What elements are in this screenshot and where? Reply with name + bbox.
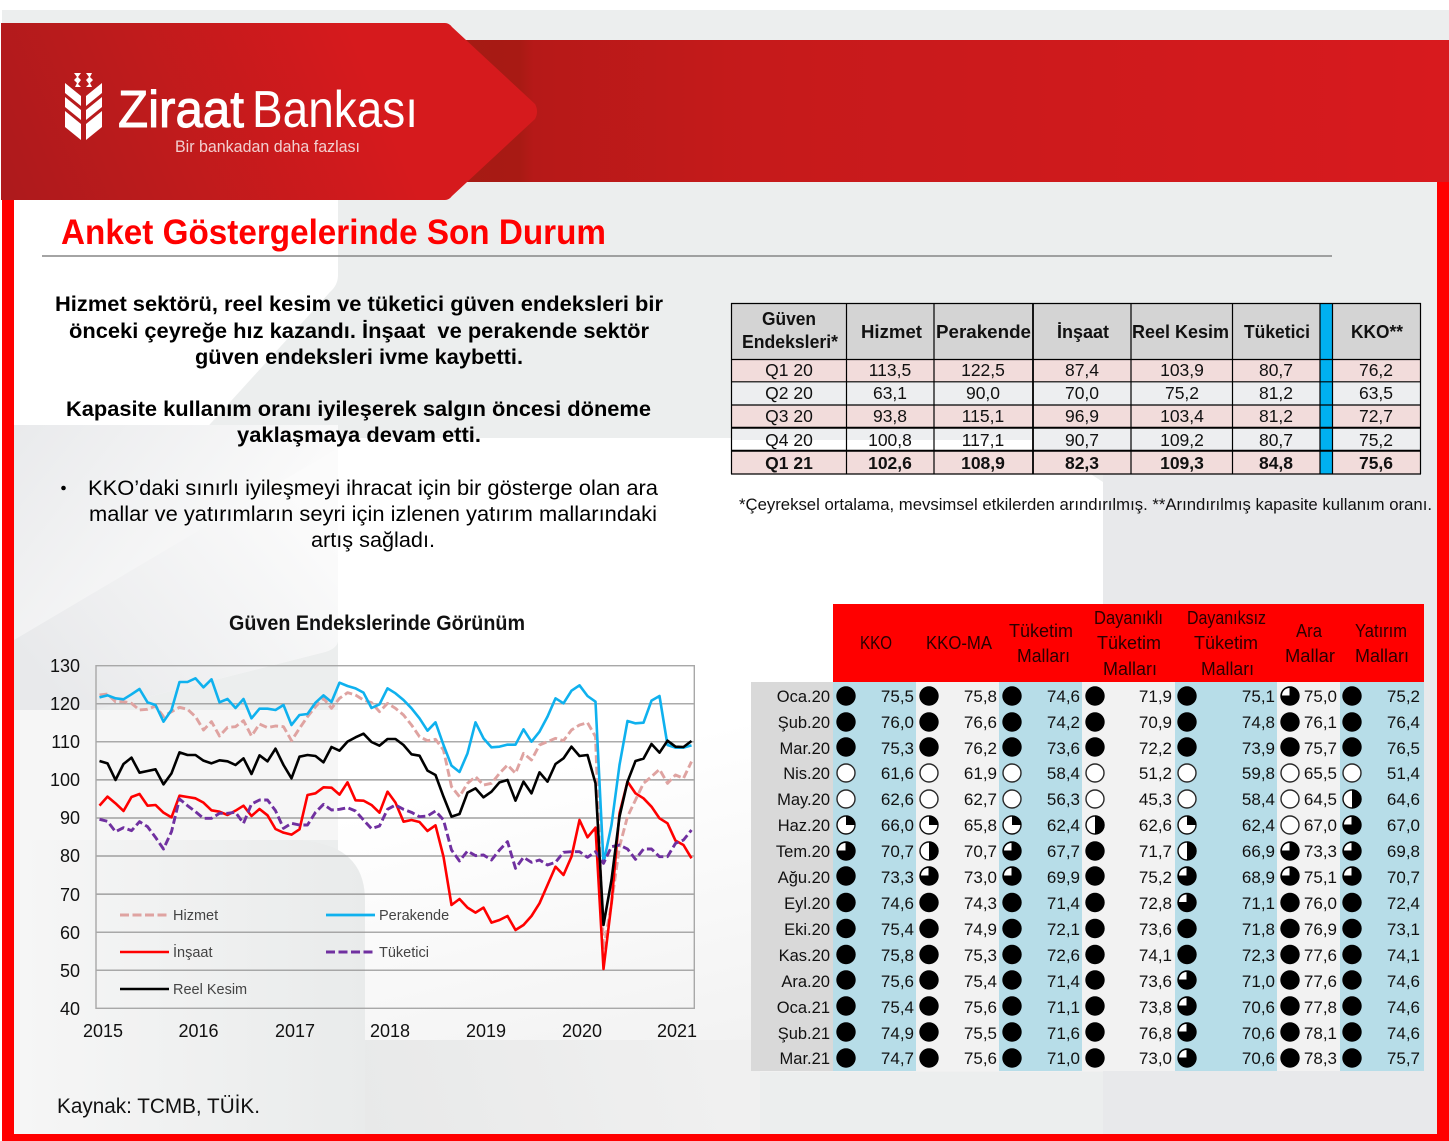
- row: Oca.21: Oca.21: [777, 999, 830, 1017]
- row: Oca.21: 73,8: [1139, 998, 1172, 1017]
- row: Haz.20: 65,8: [964, 816, 997, 835]
- y axis labels: 130: [50, 656, 80, 676]
- row: Ara.20: 71,0: [1242, 972, 1275, 991]
- table rows: Q1 21: [765, 453, 813, 473]
- row: Şub.20: 70,9: [1139, 713, 1172, 732]
- bullet paragraph: mallar ve yatırımların seyri için izlenen yatırım mallarındaki: [89, 502, 657, 526]
- row: Ara.20: 74,6: [1387, 972, 1420, 991]
- row: Ara.20: [781, 970, 1420, 991]
- row: Kas.20: 74,1: [1139, 946, 1172, 965]
- row: Oca.20: 75,8: [964, 687, 997, 706]
- row: Mar.21: 75,6: [964, 1049, 997, 1068]
- table rows: 103,4: [1160, 406, 1204, 426]
- row: Kas.20: 72,3: [1242, 946, 1275, 965]
- row: Mar.20: Mar.20: [780, 740, 830, 758]
- series: İnşaat: [100, 782, 692, 969]
- y axis labels: 60: [60, 923, 80, 943]
- row: May.20: May.20: [777, 791, 830, 809]
- table rows: 63,5: [1359, 383, 1393, 403]
- row: Ağu.20: 68,9: [1242, 868, 1275, 887]
- bold paragraph: sector confidence: [55, 292, 664, 369]
- table rows: 93,8: [873, 406, 907, 426]
- table rows: 75,2: [1359, 430, 1393, 450]
- data rows: [776, 686, 1420, 1068]
- row: Şub.20: [778, 712, 1420, 732]
- table rows: 70,0: [1065, 383, 1099, 403]
- table rows: 84,8: [1259, 453, 1293, 473]
- row: Nis.20: 58,4: [1047, 764, 1080, 783]
- row: Şub.20: 76,0: [881, 713, 914, 732]
- logo name: Bankası: [252, 81, 418, 139]
- row: Eki.20: 73,1: [1387, 920, 1420, 939]
- row: Ara.20: Ara.20: [781, 973, 830, 991]
- table rows: 80,7: [1259, 360, 1293, 380]
- column backgrounds: [751, 682, 1424, 1071]
- bold paragraph: capacity: [66, 397, 651, 447]
- bold paragraph: sector confidence: Hizmet sektörü, reel kesim ve tüketici güven endeksleri bir: [55, 292, 664, 316]
- chart title: Güven Endekslerinde Görünüm: [229, 612, 525, 635]
- red header: Mallar: [1285, 646, 1335, 666]
- bullet paragraph: KKO’daki sınırlı iyileşmeyi ihracat için bir gösterge olan ara: [88, 476, 658, 500]
- row: Haz.20: 62,6: [1139, 816, 1172, 835]
- row: Ağu.20: 73,0: [964, 868, 997, 887]
- row: Eyl.20: [784, 893, 1420, 913]
- row: Nis.20: 61,6: [881, 764, 914, 783]
- row: Haz.20: 62,4: [1047, 816, 1080, 835]
- row: Şub.21: [778, 1022, 1420, 1043]
- row: Eki.20: 73,6: [1139, 920, 1172, 939]
- y axis labels: 110: [51, 732, 80, 752]
- red header: Tüketim: [1009, 621, 1073, 641]
- row: Tem.20: 69,8: [1387, 842, 1420, 861]
- table rows: [765, 360, 1393, 473]
- row: May.20: 62,7: [964, 790, 997, 809]
- row: Kas.20: 75,3: [964, 946, 997, 965]
- row: Mar.21: 75,7: [1387, 1049, 1420, 1068]
- bold paragraph: capacity: Kapasite kullanım oranı iyileşerek salgın öncesi döneme: [66, 397, 651, 421]
- source note: Kaynak: TCMB, TÜİK.: [57, 1095, 260, 1118]
- row: May.20: 58,4: [1242, 790, 1275, 809]
- table rows: 115,1: [962, 406, 1004, 426]
- table rows: 87,4: [1065, 360, 1099, 380]
- row: Oca.21: 75,6: [964, 998, 997, 1017]
- row: Eki.20: Eki.20: [784, 921, 830, 939]
- header arrow: [1, 23, 537, 200]
- text block: summary: [55, 292, 664, 552]
- bold paragraph: sector confidence: güven endeksleri ivme kaybetti.: [195, 345, 523, 369]
- row: Mar.20: 75,7: [1304, 739, 1337, 758]
- row: Ağu.20: 75,1: [1304, 868, 1337, 887]
- table header: Perakende: [936, 321, 1031, 342]
- row: Ağu.20: [778, 866, 1420, 887]
- y axis labels: 70: [60, 885, 80, 905]
- row: Mar.21: 71,0: [1047, 1049, 1080, 1068]
- table rows: Q3 20: [765, 406, 813, 426]
- row: Nis.20: Nis.20: [783, 765, 830, 783]
- table rows: 81,2: [1259, 383, 1293, 403]
- table: confidence indices: [731, 303, 1421, 474]
- row: Tem.20: 70,7: [881, 842, 914, 861]
- row: Ağu.20: 70,7: [1387, 868, 1420, 887]
- row: Şub.20: 74,8: [1242, 713, 1275, 732]
- row: Mar.20: 75,3: [881, 739, 914, 758]
- table rows: 72,7: [1359, 406, 1393, 426]
- row: Mar.20: 72,2: [1139, 739, 1172, 758]
- row: Oca.20: 71,9: [1139, 687, 1172, 706]
- row: Haz.20: 62,4: [1242, 816, 1275, 835]
- y axis labels: 90: [60, 808, 80, 828]
- row: Ara.20: 71,4: [1047, 972, 1080, 991]
- legend: Perakende: [326, 908, 449, 924]
- x axis labels: 2020: [562, 1021, 602, 1041]
- row: Oca.20: 75,2: [1387, 687, 1420, 706]
- row: May.20: 62,6: [881, 790, 914, 809]
- row: Eki.20: 72,1: [1047, 920, 1080, 939]
- table rows: 80,7: [1259, 430, 1293, 450]
- row: Şub.20: 76,6: [964, 713, 997, 732]
- row: Eyl.20: 74,6: [881, 894, 914, 913]
- row: Oca.21: 77,8: [1304, 998, 1337, 1017]
- row: Mar.21: 78,3: [1304, 1049, 1337, 1068]
- legend: İnşaat: İnşaat: [173, 943, 212, 961]
- table rows: 108,9: [961, 453, 1005, 473]
- legend: Reel Kesim: [120, 982, 247, 998]
- row: Eki.20: 71,8: [1242, 920, 1275, 939]
- row: Oca.20: 75,5: [881, 687, 914, 706]
- row: Eyl.20: 74,3: [964, 894, 997, 913]
- y axis labels: 50: [60, 961, 80, 981]
- icon: wheat: [65, 73, 102, 140]
- row: Oca.20: 74,6: [1047, 687, 1080, 706]
- row: Ağu.20: 69,9: [1047, 868, 1080, 887]
- row: Ara.20: 75,6: [881, 972, 914, 991]
- table header: [742, 308, 1404, 352]
- legend: [120, 908, 449, 998]
- row: Kas.20: 77,6: [1304, 946, 1337, 965]
- table rows: 75,2: [1165, 383, 1199, 403]
- row: Şub.21: 71,6: [1047, 1024, 1080, 1043]
- row: Oca.20: Oca.20: [777, 688, 830, 706]
- row: Ağu.20: 73,3: [881, 868, 914, 887]
- row: Ara.20: 77,6: [1304, 972, 1337, 991]
- table header: Hizmet: [861, 321, 922, 342]
- y axis labels: 80: [60, 846, 80, 866]
- red header: Malları: [1201, 659, 1254, 679]
- row: Şub.20: 76,4: [1387, 713, 1420, 732]
- row: Eki.20: 76,9: [1304, 920, 1337, 939]
- row: Şub.21: 75,5: [964, 1024, 997, 1043]
- row: May.20: [777, 789, 1420, 809]
- row: Ağu.20: Ağu.20: [778, 869, 830, 887]
- table rows: 102,6: [868, 453, 912, 473]
- row: May.20: 45,3: [1139, 790, 1172, 809]
- row: May.20: 56,3: [1047, 790, 1080, 809]
- row: Tem.20: 66,9: [1242, 842, 1275, 861]
- row: Ara.20: 73,6: [1139, 972, 1172, 991]
- x axis labels: 2017: [275, 1021, 315, 1041]
- row: Tem.20: 71,7: [1139, 842, 1172, 861]
- row: Şub.21: 74,6: [1387, 1024, 1420, 1043]
- row: Nis.20: 51,4: [1387, 764, 1420, 783]
- legend: Hizmet: [120, 908, 218, 924]
- row: Tem.20: [776, 841, 1420, 861]
- table header: Endeksleri*: [742, 331, 839, 352]
- row: Nis.20: 61,9: [964, 764, 997, 783]
- row: Oca.21: 71,1: [1047, 998, 1080, 1017]
- row: Ara.20: 75,4: [964, 972, 997, 991]
- table rows: 103,9: [1160, 360, 1204, 380]
- row: Mar.21: 70,6: [1242, 1049, 1275, 1068]
- row: Mar.21: [780, 1048, 1420, 1068]
- table rows: 113,5: [869, 360, 911, 380]
- legend: Perakende: Perakende: [379, 908, 449, 924]
- row: Haz.20: 67,0: [1304, 816, 1337, 835]
- row: Şub.20: 74,2: [1047, 713, 1080, 732]
- row: Eyl.20: Eyl.20: [784, 895, 830, 913]
- table rows: 109,2: [1160, 430, 1204, 450]
- table rows: 117,1: [962, 430, 1004, 450]
- series: Tüketici: [100, 799, 692, 868]
- red header: Ara: [1296, 621, 1323, 641]
- legend: Hizmet: Hizmet: [173, 908, 218, 924]
- logo tagline: Bir bankadan daha fazlası: [175, 138, 360, 156]
- series: Perakende: [100, 678, 692, 863]
- y axis labels: 40: [60, 999, 80, 1019]
- row: Şub.20: 76,1: [1304, 713, 1337, 732]
- row: Mar.20: 76,2: [964, 739, 997, 758]
- table rows: 76,2: [1359, 360, 1393, 380]
- row: Mar.21: 74,7: [881, 1049, 914, 1068]
- row: Nis.20: 51,2: [1139, 764, 1172, 783]
- row: Şub.20: Şub.20: [778, 714, 830, 732]
- row: Eyl.20: 71,1: [1242, 894, 1275, 913]
- row: Tem.20: 73,3: [1304, 842, 1337, 861]
- red header: Malları: [1355, 646, 1409, 666]
- series: Reel Kesim: [100, 734, 692, 925]
- row: Nis.20: [783, 764, 1420, 783]
- row: Haz.20: 67,0: [1387, 816, 1420, 835]
- x axis labels: [83, 1021, 697, 1041]
- table header: İnşaat: [1057, 321, 1109, 342]
- row: Mar.20: 73,9: [1242, 739, 1275, 758]
- row: Eyl.20: 71,4: [1047, 894, 1080, 913]
- table rows: 96,9: [1065, 406, 1099, 426]
- row: Kas.20: 74,1: [1387, 946, 1420, 965]
- row: Oca.20: 75,1: [1242, 687, 1275, 706]
- x axis labels: 2021: [657, 1021, 697, 1041]
- table rows: 90,0: [966, 383, 1000, 403]
- row: May.20: 64,6: [1387, 790, 1420, 809]
- bullet paragraph: [61, 476, 658, 552]
- row: Şub.21: 74,9: [881, 1024, 914, 1043]
- table rows: 90,7: [1065, 430, 1099, 450]
- row: Şub.21: Şub.21: [778, 1025, 830, 1043]
- red header: Tüketim: [1194, 633, 1258, 653]
- bold paragraph: sector confidence: önceki çeyreğe hız kazandı. İnşaat ve perakende sektör: [69, 319, 650, 343]
- x axis labels: 2016: [178, 1021, 219, 1041]
- row: Oca.21: 70,6: [1242, 998, 1275, 1017]
- row: Kas.20: 75,8: [881, 946, 914, 965]
- row: Şub.21: 76,8: [1139, 1024, 1172, 1043]
- row: Şub.21: 70,6: [1242, 1024, 1275, 1043]
- red header: Malları: [1017, 646, 1070, 666]
- title: Anket Göstergelerinde Son Durum: [61, 213, 606, 252]
- row: Kas.20: 72,6: [1047, 946, 1080, 965]
- row: Haz.20: [778, 815, 1420, 835]
- row: Oca.21: 74,6: [1387, 998, 1420, 1017]
- row: Mar.20: [780, 737, 1420, 758]
- red header: Yatırım: [1355, 621, 1407, 641]
- row: Tem.20: 67,7: [1047, 842, 1080, 861]
- row: May.20: 64,5: [1304, 790, 1337, 809]
- legend: Reel Kesim: Reel Kesim: [173, 982, 247, 998]
- x axis labels: 2019: [466, 1021, 506, 1041]
- row: Eyl.20: 72,4: [1387, 894, 1420, 913]
- table rows: 100,8: [868, 430, 912, 450]
- table rows: Q4 20: [765, 430, 813, 450]
- legend: Tüketici: Tüketici: [379, 945, 429, 961]
- row: Eyl.20: 76,0: [1304, 894, 1337, 913]
- row: Nis.20: 59,8: [1242, 764, 1275, 783]
- red header: KKO-MA: [926, 633, 992, 653]
- logo name: [118, 81, 418, 139]
- row: Kas.20: [779, 945, 1420, 965]
- row: Oca.20: [777, 686, 1420, 706]
- bullet paragraph: artış sağladı.: [311, 528, 435, 552]
- row: Haz.20: 66,0: [881, 816, 914, 835]
- bold paragraph: capacity: yaklaşmaya devam etti.: [237, 423, 481, 447]
- row: Eyl.20: 72,8: [1139, 894, 1172, 913]
- x axis labels: 2015: [83, 1021, 123, 1041]
- table header: Güven: [762, 308, 816, 329]
- logo: Ziraat Bankası: [65, 73, 418, 156]
- table header: Tüketici: [1244, 321, 1310, 342]
- row: Tem.20: 70,7: [964, 842, 997, 861]
- red header: [833, 604, 1424, 682]
- row: Tem.20: Tem.20: [776, 843, 830, 861]
- red header: Malları: [1103, 659, 1157, 679]
- red header: Tüketim: [1097, 633, 1161, 653]
- legend: İnşaat: [120, 943, 212, 961]
- row: Mar.20: 73,6: [1047, 739, 1080, 758]
- y axis labels: 120: [50, 694, 80, 714]
- red header: Dayanıklı: [1094, 608, 1163, 628]
- row: Haz.20: Haz.20: [778, 817, 830, 835]
- y axis labels: [50, 656, 80, 1019]
- header band: [440, 40, 1449, 182]
- row: Oca.21: 75,4: [881, 998, 914, 1017]
- table rows: 109,3: [1160, 453, 1204, 473]
- table footnote: *Çeyreksel ortalama, mevsimsel etkilerden arındırılmış. **Arındırılmış kapasite kullanım oranı.: [739, 495, 1432, 514]
- row: Eki.20: 74,9: [964, 920, 997, 939]
- table rows: Q2 20: [765, 383, 813, 403]
- series: Hizmet: [100, 693, 692, 950]
- x axis labels: 2018: [370, 1021, 410, 1041]
- row: Eki.20: [784, 919, 1420, 939]
- red header: Dayanıksız: [1187, 608, 1266, 628]
- row: Nis.20: 65,5: [1304, 764, 1337, 783]
- row: Kas.20: Kas.20: [779, 947, 830, 965]
- line chart: confidence indices: [50, 656, 697, 1041]
- row: Mar.21: 73,0: [1139, 1049, 1172, 1068]
- table rows: 75,6: [1359, 453, 1393, 473]
- table rows: 81,2: [1259, 406, 1293, 426]
- row: Eki.20: 75,4: [881, 920, 914, 939]
- red header: KKO: [860, 633, 892, 653]
- grid: [96, 666, 694, 1008]
- y axis labels: 100: [50, 770, 80, 790]
- table: capacity utilization: [751, 604, 1424, 1071]
- table header: Reel Kesim: [1132, 321, 1229, 342]
- table header: KKO**: [1351, 321, 1404, 342]
- row: Oca.20: 75,0: [1304, 687, 1337, 706]
- row: Mar.21: Mar.21: [780, 1050, 830, 1068]
- legend: Tüketici: [326, 945, 429, 961]
- table rows: 82,3: [1065, 453, 1099, 473]
- row: Oca.21: [777, 996, 1420, 1017]
- table rows: 122,5: [961, 360, 1005, 380]
- table fills: [731, 303, 1421, 474]
- row: Mar.20: 76,5: [1387, 739, 1420, 758]
- logo name: Ziraat: [118, 81, 245, 139]
- table rows: 63,1: [873, 383, 907, 403]
- row: Şub.21: 78,1: [1304, 1024, 1337, 1043]
- row: Ağu.20: 75,2: [1139, 868, 1172, 887]
- table rows: Q1 20: [765, 360, 813, 380]
